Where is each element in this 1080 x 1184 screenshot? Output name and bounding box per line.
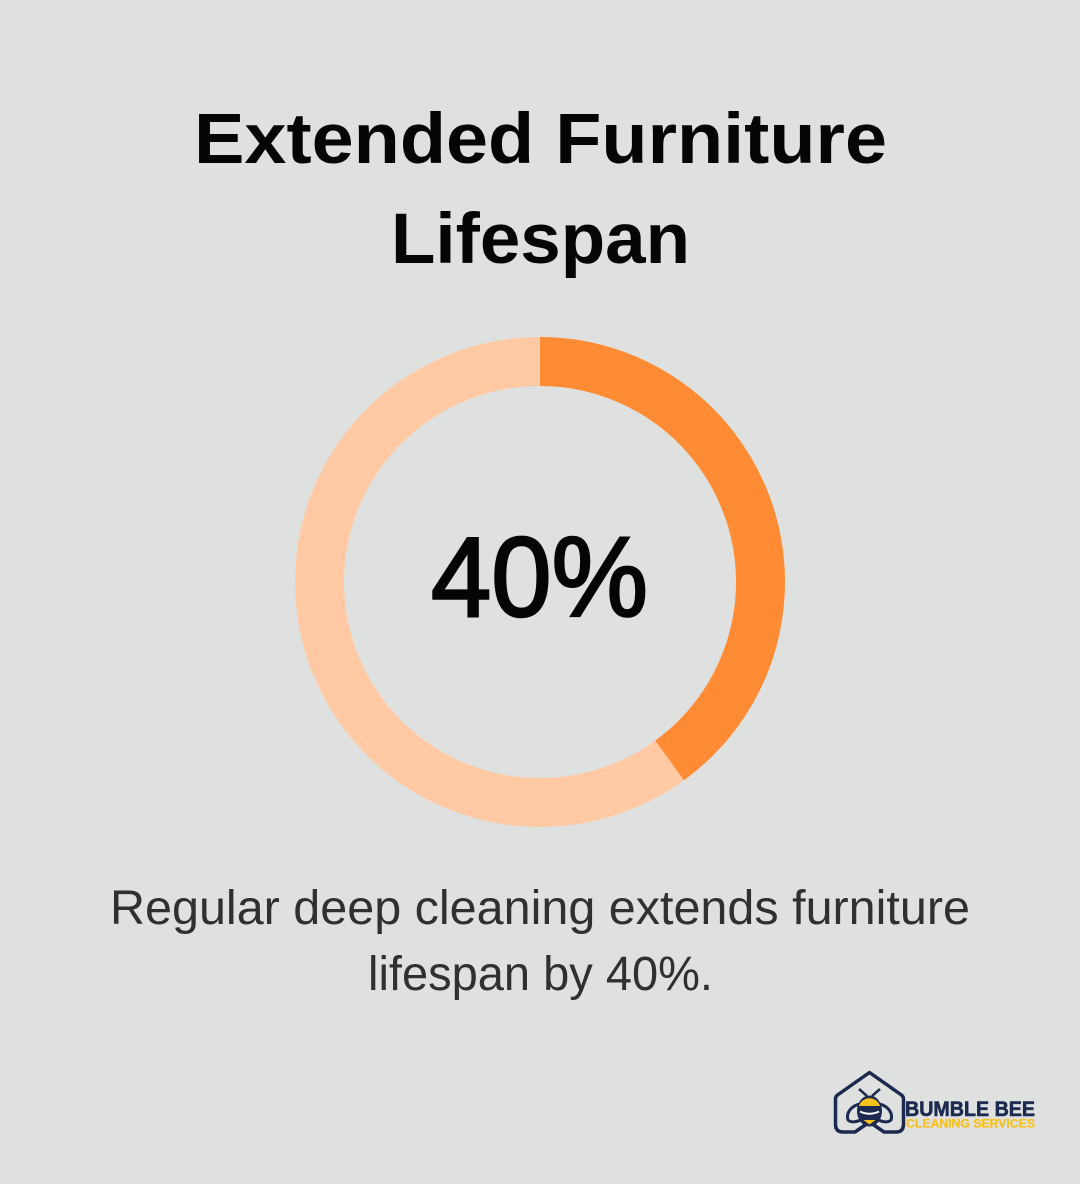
icon: house outline xyxy=(836,1072,904,1132)
title: Extended Furniture xyxy=(194,100,887,179)
title: Lifespan xyxy=(391,200,690,279)
donut chart: 40% xyxy=(320,362,761,802)
description text xyxy=(110,882,970,1001)
highlighted 40% arc xyxy=(540,362,761,760)
logo: Bumble Bee Cleaning Services xyxy=(836,1072,1035,1132)
logo wordmark: BUMBLE BEE xyxy=(905,1098,1035,1121)
logo tagline: CLEANING SERVICES xyxy=(906,1118,1035,1130)
description text: lifespan by 40%. xyxy=(368,948,713,1001)
description text: Regular deep cleaning extends furniture xyxy=(110,882,970,935)
remaining share of ring xyxy=(320,362,760,802)
title xyxy=(194,100,887,279)
icon: bee xyxy=(848,1089,892,1126)
centre value: 40% xyxy=(431,514,648,640)
